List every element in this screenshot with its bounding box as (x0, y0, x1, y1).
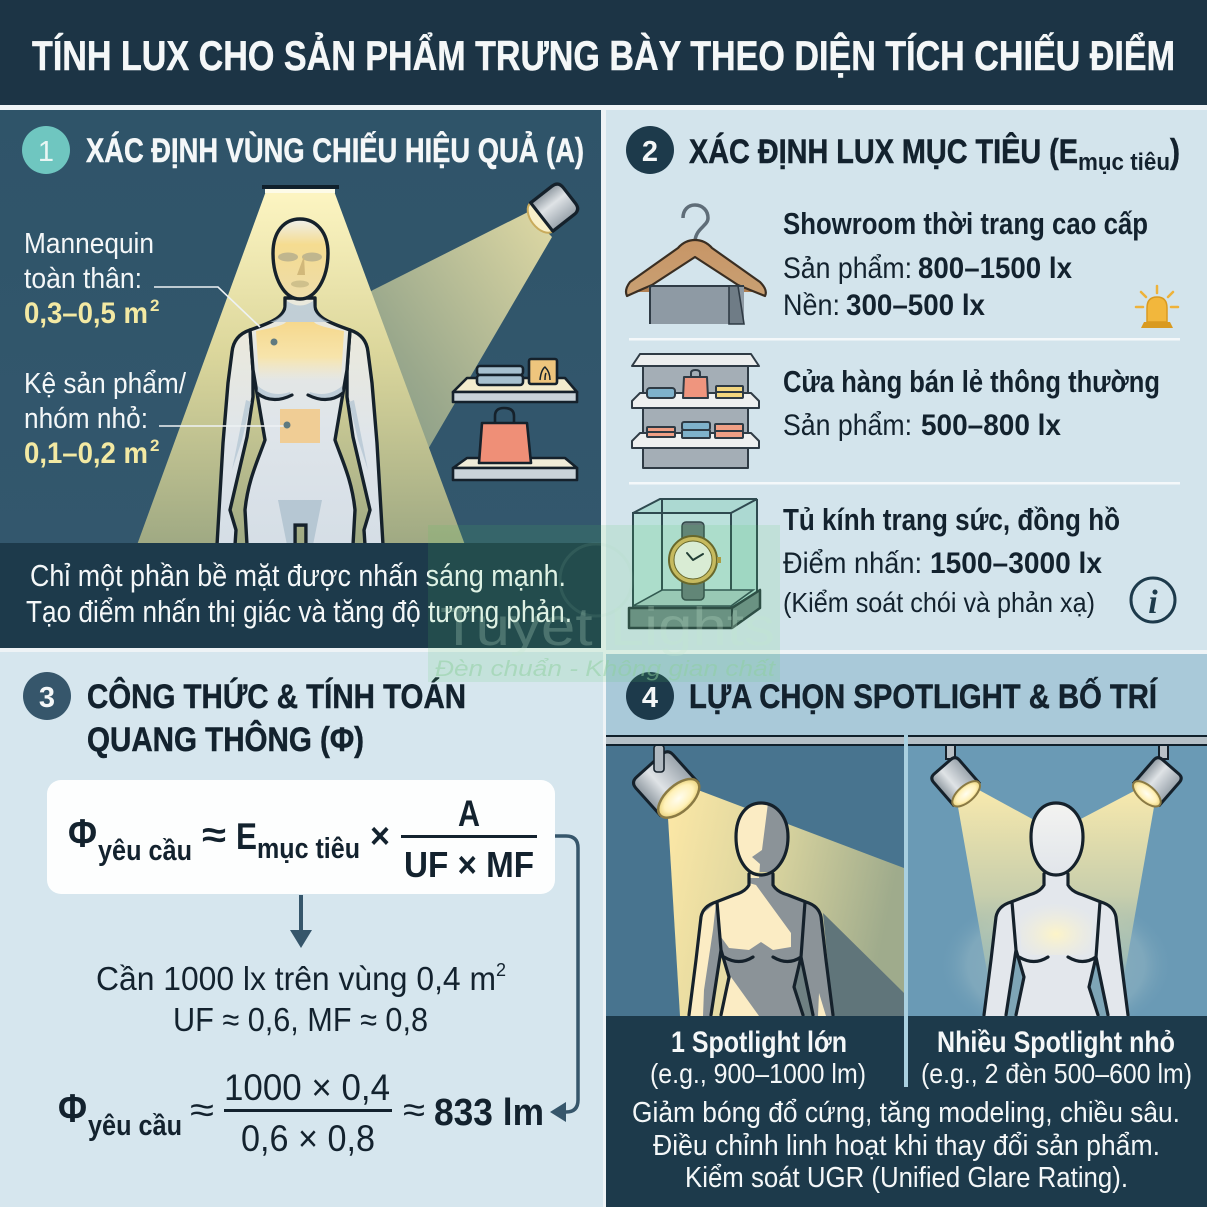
formula card: Φ (68, 812, 97, 856)
formula card: × (370, 815, 390, 856)
section 3 heading: CÔNG THỨC & TÍNH TOÁN (87, 677, 466, 716)
label: kệ sản phẩm: Kệ sản phẩm/ (24, 368, 187, 400)
scene: one large spotlight (606, 745, 904, 1017)
formula card: yêu cầu (98, 835, 192, 867)
watermark (428, 525, 780, 682)
vertical divider between options (904, 735, 908, 1087)
chest lit zone (256, 322, 344, 380)
block: showroom thời trang (783, 206, 1148, 322)
block: cửa hàng bán lẻ (783, 364, 1160, 442)
icon: lower shelf with shopping bag (453, 408, 577, 480)
result equation: Φ (58, 1087, 87, 1131)
panel 3: công thức (0, 652, 603, 1207)
result equation: yêu cầu (88, 1110, 182, 1142)
label: kệ sản phẩm: nhóm nhỏ: (24, 403, 148, 435)
block: showroom thời trang: 800–1500 lx (918, 252, 1072, 285)
option 1 label: (e.g., 900–1000 lm) (650, 1058, 866, 1089)
label: kệ sản phẩm (24, 368, 187, 470)
caption strip (606, 1016, 1207, 1207)
section 3 number badge (23, 672, 71, 720)
icon: info: i (1148, 584, 1158, 621)
icon: glass case with watch (629, 499, 760, 628)
option 1 label: 1 Spotlight lớn (671, 1026, 847, 1059)
block: showroom thời trang: Sản phẩm: (783, 252, 912, 285)
mannequin: full body (217, 219, 383, 545)
worked example text: 2 (496, 960, 506, 980)
icon: side spotlight (522, 181, 580, 238)
icon: warning lamp (1136, 286, 1178, 328)
icon: upper shelf with towels and candle (453, 359, 577, 402)
divider (629, 482, 1180, 484)
arrow: down to example (290, 895, 312, 948)
worked example text (96, 960, 506, 1038)
icon: left small spotlight (930, 745, 984, 811)
block: showroom thời trang: Nền: (783, 289, 840, 322)
option 2 label (921, 1026, 1192, 1089)
body shading strips (232, 301, 368, 470)
arrow: formula to result (550, 836, 578, 1122)
section 2 number badge (626, 126, 674, 174)
block: cửa hàng bán lẻ: Sản phẩm: (783, 409, 912, 442)
label: mannequin toàn thân (24, 228, 159, 330)
label: kệ sản phẩm: 2 (150, 436, 159, 455)
formula card: ≈ (202, 814, 226, 855)
watermark: Đèn chuẩn - Không gian chất (435, 656, 776, 681)
scene: several small spotlights (908, 745, 1207, 1040)
cast shadow (823, 913, 904, 1016)
icon: info (1131, 578, 1175, 622)
section 2 heading: ) (1170, 133, 1180, 171)
mannequin evenly lit (984, 803, 1128, 1016)
right arm (347, 330, 383, 545)
label: mannequin toàn thân: toàn thân: (24, 263, 142, 295)
icon: hanger with cloth (626, 205, 766, 324)
header band (0, 0, 1207, 105)
mannequin face (278, 252, 322, 288)
icon: large spotlight (631, 745, 706, 825)
notes (632, 1097, 1180, 1194)
block: showroom thời trang: 300–500 lx (846, 289, 985, 322)
formula card: E (236, 816, 257, 857)
leader line: kệ sản phẩm (159, 422, 290, 428)
block: cửa hàng bán lẻ: 500–800 lx (921, 409, 1061, 442)
watermark: Tuyet Lights (440, 597, 775, 657)
small target patch (280, 409, 320, 443)
leader line: toàn thân (154, 287, 278, 346)
left arm (217, 330, 253, 545)
label: kệ sản phẩm: 0,1–0,2 m (24, 437, 148, 470)
left beam (958, 790, 1056, 1000)
icon: retail shelves (632, 354, 759, 468)
panel 2: lux mục tiêu (606, 110, 1207, 650)
section 1 heading: XÁC ĐỊNH VÙNG CHIẾU HIỆU QUẢ (A) (86, 132, 584, 170)
label: mannequin toàn thân: Mannequin (24, 228, 154, 260)
formula card: A (458, 793, 480, 834)
formula card: mục tiêu (257, 833, 360, 865)
mannequin lit and shaded (686, 798, 833, 1016)
block: tủ kính trang sức: (Kiểm soát chói và phản xạ) (783, 587, 1095, 618)
result equation: ≈ (403, 1089, 425, 1130)
result equation: 833 lm (434, 1092, 544, 1134)
worked example text: UF ≈ 0,6, MF ≈ 0,8 (173, 1001, 428, 1038)
notes: Kiểm soát UGR (Unified Glare Rating). (685, 1162, 1128, 1194)
section 3 number badge: 3 (39, 682, 55, 714)
caption strip: Chỉ một phần bề mặt được nhấn sáng mạnh. (30, 558, 566, 593)
right beam (1056, 790, 1154, 1000)
head (273, 219, 328, 299)
chest lines (257, 393, 343, 400)
divider (629, 338, 1180, 340)
beam (668, 790, 904, 1016)
track rail (606, 735, 1207, 746)
panel 4: lựa chọn spotlight (606, 654, 1207, 1207)
result equation: ≈ (190, 1089, 214, 1130)
ceiling light cone (137, 185, 465, 545)
side spotlight beam (330, 212, 552, 545)
hip shade (278, 500, 322, 545)
section 2 heading: XÁC ĐỊNH LUX MỤC TIÊU (E (689, 133, 1078, 171)
section 1 number badge (22, 126, 70, 174)
torso (245, 298, 355, 545)
section 4 number badge: 4 (642, 682, 658, 714)
result equation: 1000 × 0,4 (224, 1067, 390, 1108)
block: tủ kính trang sức (783, 502, 1120, 618)
section 2 number badge: 2 (642, 136, 658, 168)
icon: right small spotlight (1129, 745, 1183, 811)
label: mannequin toàn thân: 2 (150, 296, 159, 315)
block: tủ kính trang sức: Tủ kính trang sức, đồng hồ (783, 502, 1120, 537)
section 2 heading: mục tiêu (1078, 149, 1170, 176)
result equation (58, 1067, 544, 1159)
section 3 heading (87, 677, 466, 759)
block: tủ kính trang sức: 1500–3000 lx (930, 547, 1102, 580)
panel 1: vùng chiếu hiệu quả (0, 110, 601, 648)
label: mannequin toàn thân: 0,3–0,5 m (24, 297, 148, 330)
notes: Điều chỉnh linh hoạt khi thay đổi sản phẩm. (653, 1130, 1160, 1162)
option 1 label (650, 1026, 866, 1089)
worked example text: Cần 1000 lx trên vùng 0,4 m (96, 960, 496, 997)
section 3 heading: QUANG THÔNG (Φ) (87, 720, 364, 759)
caption strip: Tạo điểm nhấn thị giác và tăng độ tương phản. (26, 594, 572, 629)
caption strip (0, 543, 601, 648)
section 1 number badge: 1 (38, 136, 54, 168)
block: tủ kính trang sức: Điểm nhấn: (783, 547, 922, 580)
formula card: UF × MF (404, 844, 534, 885)
result equation: 0,6 × 0,8 (241, 1118, 375, 1159)
section 4 number badge (626, 672, 674, 720)
formula card (47, 780, 555, 894)
soft glow (938, 890, 1174, 1040)
